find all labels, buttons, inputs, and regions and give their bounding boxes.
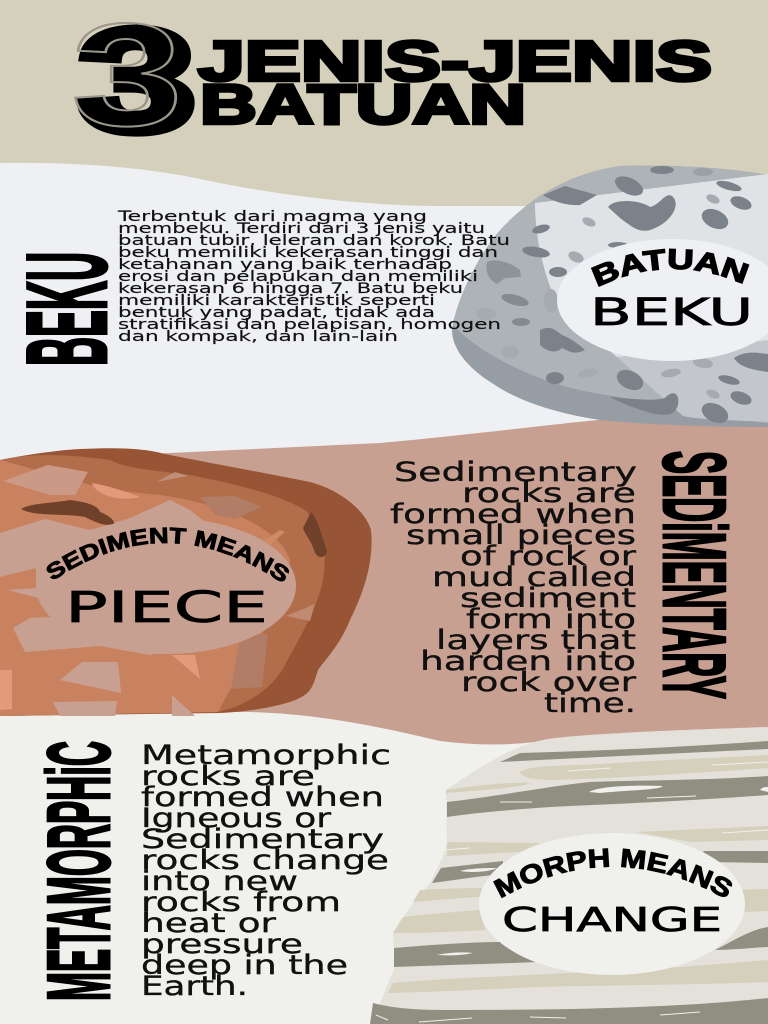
text block: sedimentary description: formed when — [390, 499, 636, 530]
text block: beku description: bentuk yang padat, tidak ada — [118, 305, 435, 321]
text block: metamorphic description: Igneous or — [141, 803, 331, 834]
panel: sedimentary background — [0, 416, 768, 760]
text block: beku description: stratifikasi dan pelapisan, homogen — [118, 317, 501, 333]
label: morph means change ellipse — [479, 833, 745, 975]
text block: sedimentary description: harden into — [420, 646, 636, 677]
big number 3 — [71, 0, 195, 161]
text block: beku description: ketahanan yang baik terhadap — [118, 257, 452, 273]
tan strata — [388, 755, 768, 993]
label: batuan beku ellipse — [557, 239, 768, 361]
text block: beku description: Terbentuk dari magma yang — [116, 209, 427, 225]
text block: beku description: memiliki karakteristik seperti — [118, 293, 435, 309]
text block: sedimentary description: small pieces — [406, 520, 636, 551]
text block: metamorphic description: heat or — [141, 908, 276, 939]
text block: sedimentary description: rocks are — [462, 478, 636, 509]
text block: beku description: beku memiliki kekerasan tinggi dan — [118, 245, 498, 261]
illustration: igneous rock — [452, 165, 768, 427]
illustration: metamorphic rock — [370, 727, 768, 1024]
title line 2: BATUAN — [200, 72, 526, 136]
text: METAMORPHiC — [29, 741, 128, 1001]
text block: beku description: dan kompak, dan lain-lain — [118, 329, 398, 345]
text block: metamorphic description: rocks change — [141, 845, 389, 876]
text block: metamorphic description: deep in the — [141, 950, 348, 981]
panel: title background — [0, 0, 768, 240]
rock fragments — [0, 465, 240, 716]
text block: metamorphic description: Metamorphic — [141, 740, 391, 771]
big number 3: 3 — [79, 0, 195, 161]
illustration: sedimentary rock — [0, 448, 372, 716]
label: beku: BEKU — [590, 291, 753, 334]
text block: sedimentary description: layers that — [436, 625, 636, 656]
curved label: morph means: MORPH MEANS — [493, 848, 732, 898]
peach accents — [0, 483, 200, 710]
text block: metamorphic description: pressure — [141, 929, 303, 960]
text block: metamorphic description: into new — [141, 866, 298, 897]
text block: metamorphic description: rocks are — [141, 761, 315, 792]
label: sediment means piece ellipse — [38, 520, 296, 654]
text block: sedimentary description: time. — [544, 688, 636, 719]
gray strata — [370, 741, 768, 1024]
curved label: batuan: BATUAN — [590, 248, 750, 287]
label: piece: PIECE — [65, 583, 268, 633]
text block: sedimentary description: Sedimentary — [394, 457, 637, 488]
text block: metamorphic description: Sedimentary — [141, 824, 384, 855]
text block: beku description: membeku. Terdiri dari 3 jenis yaitu — [118, 221, 485, 237]
text block: beku description: batuan tubir, leleran dan korok. Batu — [118, 233, 510, 249]
text block: metamorphic description: formed when — [141, 782, 384, 813]
title — [71, 0, 712, 161]
text block: beku description: kekerasan 6 hingga 7. Batu beku — [118, 281, 463, 297]
text block: beku description: erosi dan pelapukan dan memiliki — [118, 269, 478, 285]
text block: sedimentary description: rock over — [461, 667, 636, 698]
text block: metamorphic description: rocks from — [141, 887, 341, 918]
white veins — [437, 786, 768, 955]
title line 1: JENIS-JENIS — [198, 30, 712, 94]
text block: sedimentary description: form into — [466, 604, 636, 635]
text block: sedimentary description: of rock or — [460, 541, 636, 572]
panel: batuan beku background — [0, 163, 768, 460]
label: change: CHANGE — [502, 900, 722, 939]
curved label: sediment means: SEDIMENT MEANS — [46, 527, 290, 582]
text block: sedimentary description: sediment — [460, 583, 636, 614]
text block: metamorphic description: Earth. — [141, 971, 248, 1002]
dark spots — [21, 500, 114, 525]
panel: metamorphic background — [0, 712, 768, 1024]
text block: sedimentary description: mud called — [432, 562, 636, 593]
text: BEKU — [4, 252, 130, 366]
